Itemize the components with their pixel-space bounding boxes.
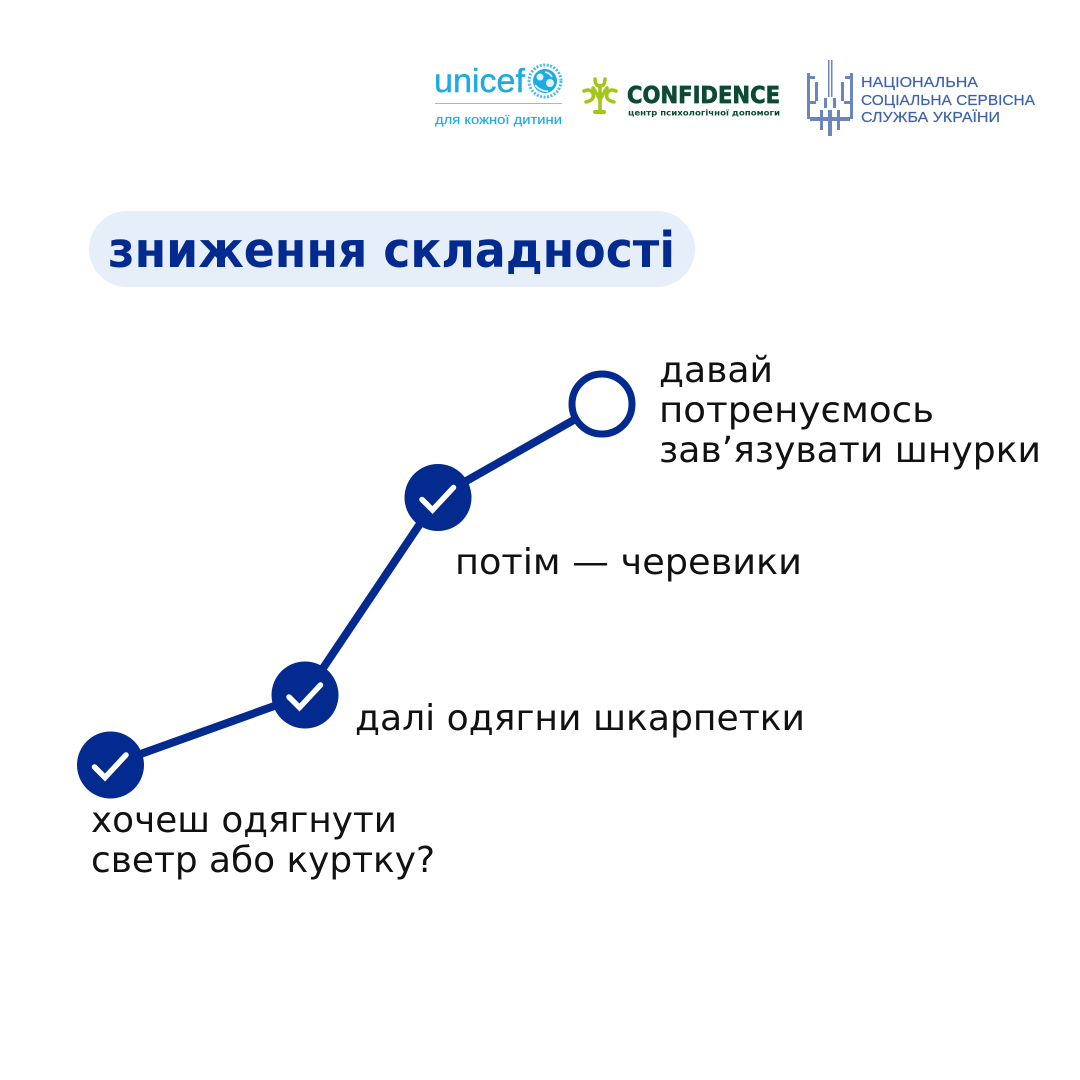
step 4 marker: open goal <box>572 374 632 434</box>
text: step 1: хочеш одягнути <box>91 800 397 841</box>
text: step 3: потім — черевики <box>455 542 802 583</box>
icon: unicef emblem <box>529 65 561 97</box>
logo: unicef: unicef <box>434 62 526 99</box>
text: step 1: светр або куртку? <box>91 840 435 881</box>
text: step 4: давай <box>659 350 773 391</box>
logo: unicef <box>434 62 562 127</box>
step 3 marker <box>404 464 472 531</box>
text: step 4 <box>659 350 1041 471</box>
logo: confidence: центр психологічної допомоги <box>628 108 780 118</box>
logo: national social service of Ukraine: СЛУЖБА УКРАЇНИ <box>861 109 1000 126</box>
icon: trident <box>807 60 853 136</box>
text: step 4: потренуємось <box>659 390 934 431</box>
logo: national social service of Ukraine <box>807 60 1035 136</box>
logo: unicef: для кожної дитини <box>435 112 562 127</box>
logo: confidence <box>584 79 780 118</box>
icon: confidence tree <box>584 79 616 112</box>
heading: зниження складності: зниження складності <box>108 222 675 279</box>
logo: confidence: CONFIDENCE <box>627 83 780 109</box>
text: step 1 <box>91 800 435 881</box>
text: step 4: зав’язувати шнурки <box>659 430 1041 471</box>
logo: national social service of Ukraine: НАЦІОНАЛЬНА <box>861 74 978 91</box>
logo: national social service of Ukraine: СОЦІАЛЬНА СЕРВІСНА <box>861 92 1035 109</box>
step 1 marker <box>77 732 144 798</box>
chart: step line <box>77 374 632 798</box>
step 2 marker <box>272 662 338 728</box>
text: step 2: далі одягни шкарпетки <box>355 698 805 739</box>
connecting line <box>110 404 602 765</box>
